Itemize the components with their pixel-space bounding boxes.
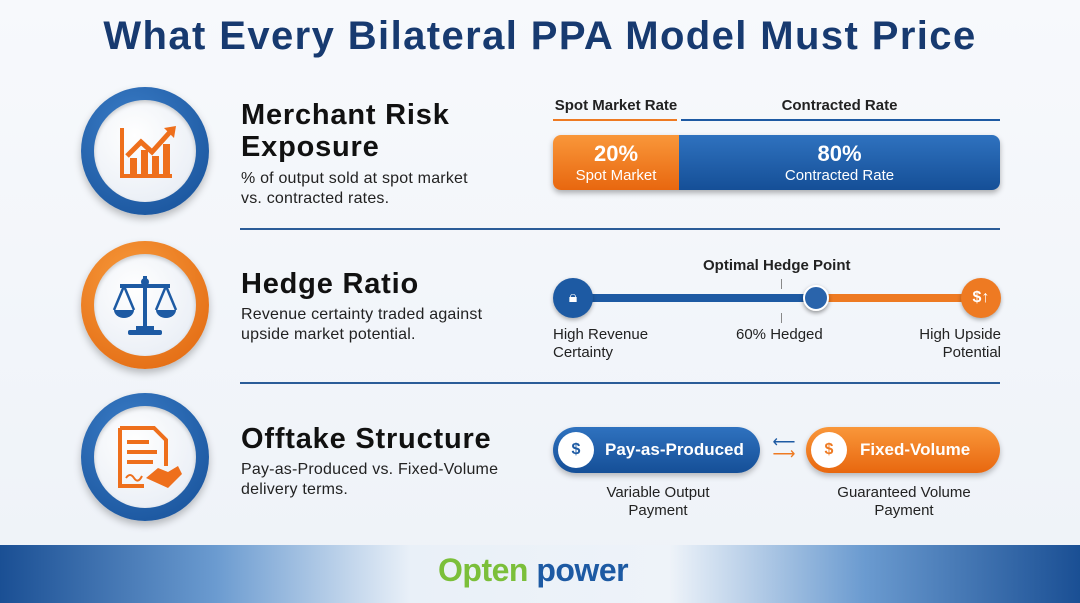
desc: offtake: Pay-as-Produced vs. Fixed-Volume: [241, 461, 498, 478]
desc: hedge ratio: [241, 306, 482, 343]
bar: 20/80: Spot Market: [576, 167, 656, 184]
icon: chart circle: [81, 87, 209, 215]
arrows: [773, 434, 795, 463]
desc: offtake: [241, 461, 498, 498]
hedge slider: 60% Hedged: [736, 326, 823, 343]
bar: 20/80: 20%: [594, 141, 638, 166]
arrows: ⟶: [773, 446, 795, 463]
heading: hedge ratio: Hedge Ratio: [241, 268, 419, 300]
pill captions: Payment: [628, 502, 688, 519]
bar labels: [553, 97, 1000, 121]
icon: contract circle: [81, 393, 209, 521]
pill: pay-as-produced: [553, 427, 760, 473]
desc: merchant risk: % of output sold at spot market: [241, 170, 468, 187]
desc: offtake: delivery terms.: [241, 481, 348, 498]
icon: scales circle: [81, 241, 209, 369]
desc: hedge ratio: Revenue certainty traded against: [241, 306, 482, 323]
pill: fixed-volume: Fixed-Volume: [860, 440, 970, 459]
desc: merchant risk: [241, 170, 468, 207]
bar: 20/80: 80%: [817, 141, 862, 166]
heading: merchant risk: Merchant Risk: [241, 99, 450, 131]
icon: lock: [553, 278, 593, 318]
pill: fixed-volume: [806, 427, 1000, 473]
pill captions: [606, 484, 710, 519]
footer band: [0, 545, 1080, 603]
heading: offtake: Offtake Structure: [241, 423, 492, 455]
heading: merchant risk: Exposure: [241, 131, 380, 163]
bar labels: Contracted Rate: [782, 97, 897, 114]
hedge slider: High Upside: [919, 326, 1001, 343]
text: Payment: [874, 502, 934, 519]
icon: upside coin: $↑: [973, 289, 989, 306]
hedge slider: High Revenue: [553, 326, 648, 343]
hedge slider: Potential: [943, 344, 1001, 361]
hedge slider: Optimal Hedge Point: [703, 257, 851, 274]
text: Guaranteed Volume: [837, 484, 971, 501]
title: What Every Bilateral PPA Model Must Price: [103, 14, 977, 58]
arrows: ⟵: [773, 434, 795, 451]
bar labels: Spot Market Rate: [555, 97, 677, 114]
pill captions: Variable Output: [606, 484, 710, 501]
desc: hedge ratio: upside market potential.: [241, 326, 416, 343]
desc: merchant risk: vs. contracted rates.: [241, 190, 389, 207]
pill: fixed-volume: $: [825, 441, 833, 458]
icon: lock: 🔒︎: [569, 289, 577, 306]
hedge slider: [550, 257, 1004, 361]
bar: 20/80: Contracted Rate: [785, 167, 894, 184]
pill: pay-as-produced: $: [572, 441, 580, 458]
hedge slider: Certainty: [553, 344, 613, 361]
knob: [803, 285, 829, 311]
pill: pay-as-produced: Pay-as-Produced: [605, 440, 744, 459]
icon: upside coin: [961, 278, 1001, 318]
logo: Opten power: [438, 552, 628, 588]
heading: merchant risk: [241, 99, 450, 163]
bar: 20/80: [553, 135, 1000, 190]
